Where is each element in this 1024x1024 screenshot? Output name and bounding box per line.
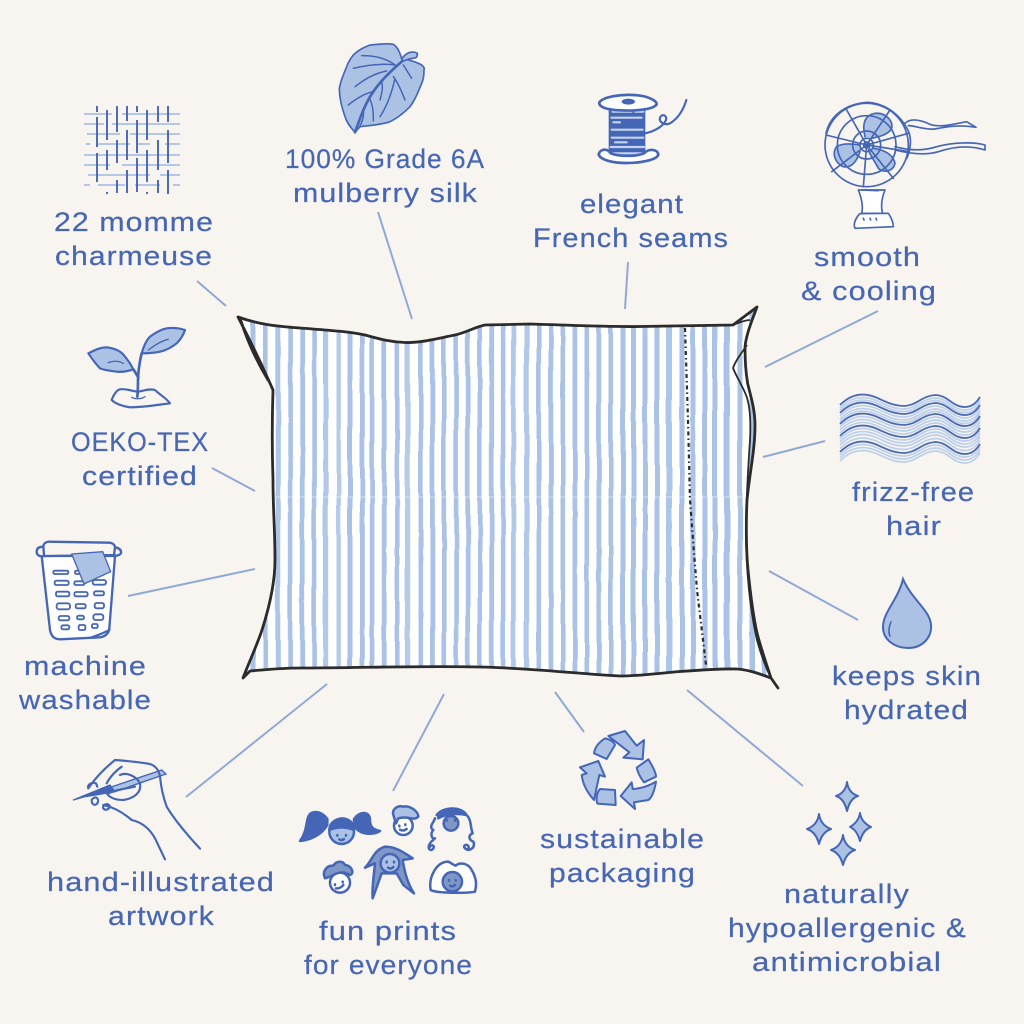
label: machine washable: machine: [24, 651, 147, 681]
face: girl with long hair: [365, 847, 414, 898]
label: 100% Grade 6A mulberry silk: [285, 144, 485, 208]
icon: cartoon faces: [300, 806, 476, 898]
connector line: [186, 684, 327, 797]
feature: frizz-free hair: [763, 395, 980, 541]
connector line: [197, 281, 226, 306]
connector line: [769, 571, 858, 620]
label: 100% Grade 6A mulberry silk: mulberry silk: [293, 178, 478, 208]
face: girl with pigtails: [300, 812, 380, 844]
label: sustainable packaging: sustainable: [540, 824, 705, 854]
label: smooth and cooling: & cooling: [801, 276, 937, 306]
pillow outline: [238, 307, 778, 688]
label: keeps skin hydrated: [832, 661, 982, 725]
face: boy with light hair: [393, 806, 418, 835]
label: 100% Grade 6A mulberry silk: 100% Grade 6A: [285, 144, 485, 174]
label: fun prints for everyone: for everyone: [304, 950, 473, 980]
icon: wavy hair: [840, 395, 980, 463]
icon: laundry basket: [37, 542, 121, 639]
feature: sustainable packaging: [540, 692, 705, 888]
icon: electric fan: [825, 102, 985, 228]
label: hand-illustrated artwork: [47, 867, 275, 931]
label: elegant French seams: French seams: [533, 223, 729, 253]
feature: hand-illustrated artwork: [47, 684, 327, 931]
label: frizz-free hair: [852, 477, 975, 541]
feature: French seams: [533, 95, 729, 309]
connector line: [763, 441, 825, 457]
face: girl with curly hair: [429, 809, 474, 850]
connector line: [555, 692, 584, 732]
connector line: [128, 569, 255, 596]
connector line: [212, 468, 255, 491]
icon: sparkles: [807, 782, 871, 865]
label: frizz-free hair: hair: [886, 511, 942, 541]
label: hand-illustrated artwork: hand-illustrated: [47, 867, 275, 897]
pillow fabric with stripes: [242, 311, 768, 676]
icon: hand drawing with pencil: [73, 760, 200, 859]
connector line: [378, 212, 412, 319]
feature: hypoallergenic and antimicrobial: [687, 690, 967, 977]
side flap seam: [733, 320, 771, 678]
label: hand-illustrated artwork: artwork: [108, 901, 215, 931]
feature: fun prints: [300, 694, 476, 980]
feature: mulberry silk: [285, 44, 485, 319]
French seam stitching: [685, 328, 706, 665]
icon: recycling arrows: [580, 731, 656, 809]
pillowcase illustration: [230, 300, 790, 700]
label: 22 momme charmeuse: 22 momme: [54, 207, 214, 237]
connector line: [687, 690, 803, 786]
label: machine washable: washable: [18, 685, 152, 715]
face: boy with curly hair: [324, 862, 352, 893]
icon: seedling: [88, 328, 185, 407]
label: OEKO-TEX certified: [71, 427, 209, 491]
label: fun prints for everyone: [304, 916, 473, 980]
label: naturally hypoallergenic and antimicrobial: [728, 879, 967, 977]
label: keeps skin hydrated: keeps skin: [832, 661, 982, 691]
label: naturally hypoallergenic and antimicrobial: hypoallergenic &: [728, 913, 967, 943]
feature: smooth and cooling: [765, 102, 985, 367]
label: naturally hypoallergenic and antimicrobial: antimicrobial: [752, 947, 942, 977]
label: elegant French seams: elegant: [580, 189, 684, 219]
label: fun prints for everyone: fun prints: [319, 916, 457, 946]
icon: mulberry leaf: [339, 44, 424, 132]
label: OEKO-TEX certified: OEKO-TEX: [71, 427, 209, 457]
face: person with white bun hair: [430, 862, 476, 893]
label: elegant French seams: [533, 189, 729, 253]
label: OEKO-TEX certified: certified: [82, 461, 198, 491]
label: sustainable packaging: packaging: [549, 858, 696, 888]
feature: 22 momme charmeuse: [54, 106, 226, 306]
connector line: [393, 694, 444, 791]
feature: OEKO-TEX certified: [71, 328, 255, 491]
icon: water drop: [883, 579, 931, 648]
icon: thread spool: [599, 95, 686, 163]
connector line: [625, 262, 628, 309]
icon: woven fabric: [84, 106, 180, 194]
label: sustainable packaging: [540, 824, 705, 888]
feature: machine washable: [18, 542, 255, 715]
label: 22 momme charmeuse: [54, 207, 214, 271]
label: frizz-free hair: frizz-free: [852, 477, 975, 507]
label: smooth and cooling: smooth: [814, 242, 921, 272]
label: smooth and cooling: [801, 242, 937, 306]
label: naturally hypoallergenic and antimicrobial: naturally: [784, 879, 910, 909]
label: 22 momme charmeuse: charmeuse: [55, 241, 213, 271]
feature: keeps skin hydrated: [769, 571, 982, 725]
connector line: [765, 311, 878, 367]
label: machine washable: [18, 651, 152, 715]
label: keeps skin hydrated: hydrated: [844, 695, 969, 725]
